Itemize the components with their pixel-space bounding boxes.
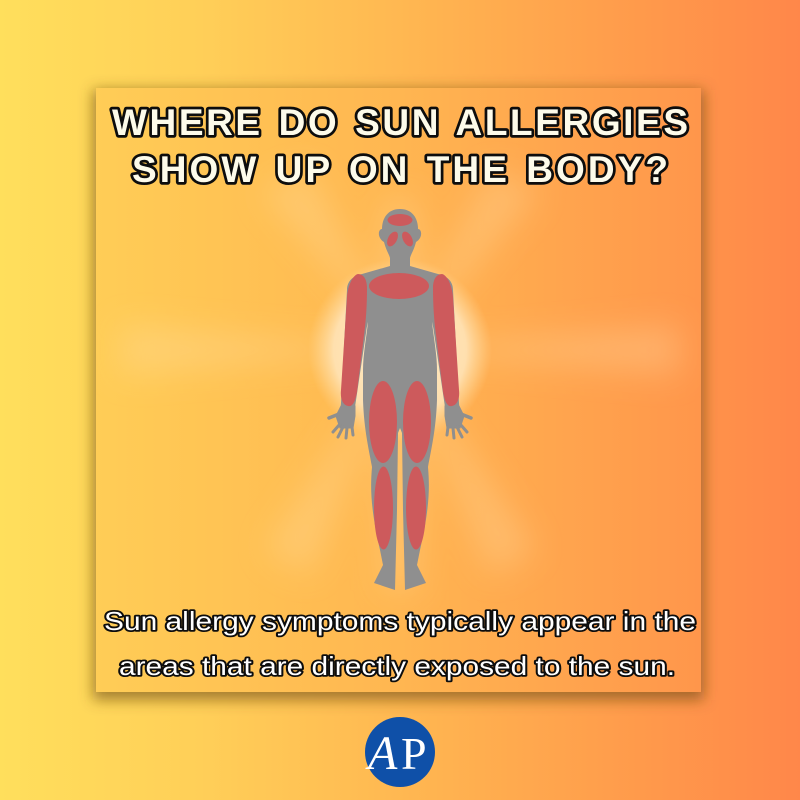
human body figure — [329, 209, 471, 590]
panel: main card — [96, 88, 701, 692]
icon: right hand — [445, 406, 471, 438]
logo: AP badge — [365, 717, 435, 787]
title: WHERE DO SUN ALLERGIES — [112, 102, 688, 143]
caption text: Sun allergy symptoms typically appear in the — [104, 606, 696, 636]
icon: left hand — [329, 406, 355, 438]
title — [112, 102, 688, 190]
logo: AP badge: P — [401, 728, 427, 779]
affected areas in red — [341, 214, 459, 550]
caption text: areas that are directly exposed to the sun. — [119, 651, 675, 681]
sun glow with rays — [120, 170, 680, 590]
panel shadow — [93, 90, 704, 700]
title: SHOW UP ON THE BODY? — [132, 149, 668, 190]
caption text — [104, 606, 696, 681]
body silhouette — [340, 209, 460, 590]
logo: AP badge: A — [365, 727, 398, 780]
